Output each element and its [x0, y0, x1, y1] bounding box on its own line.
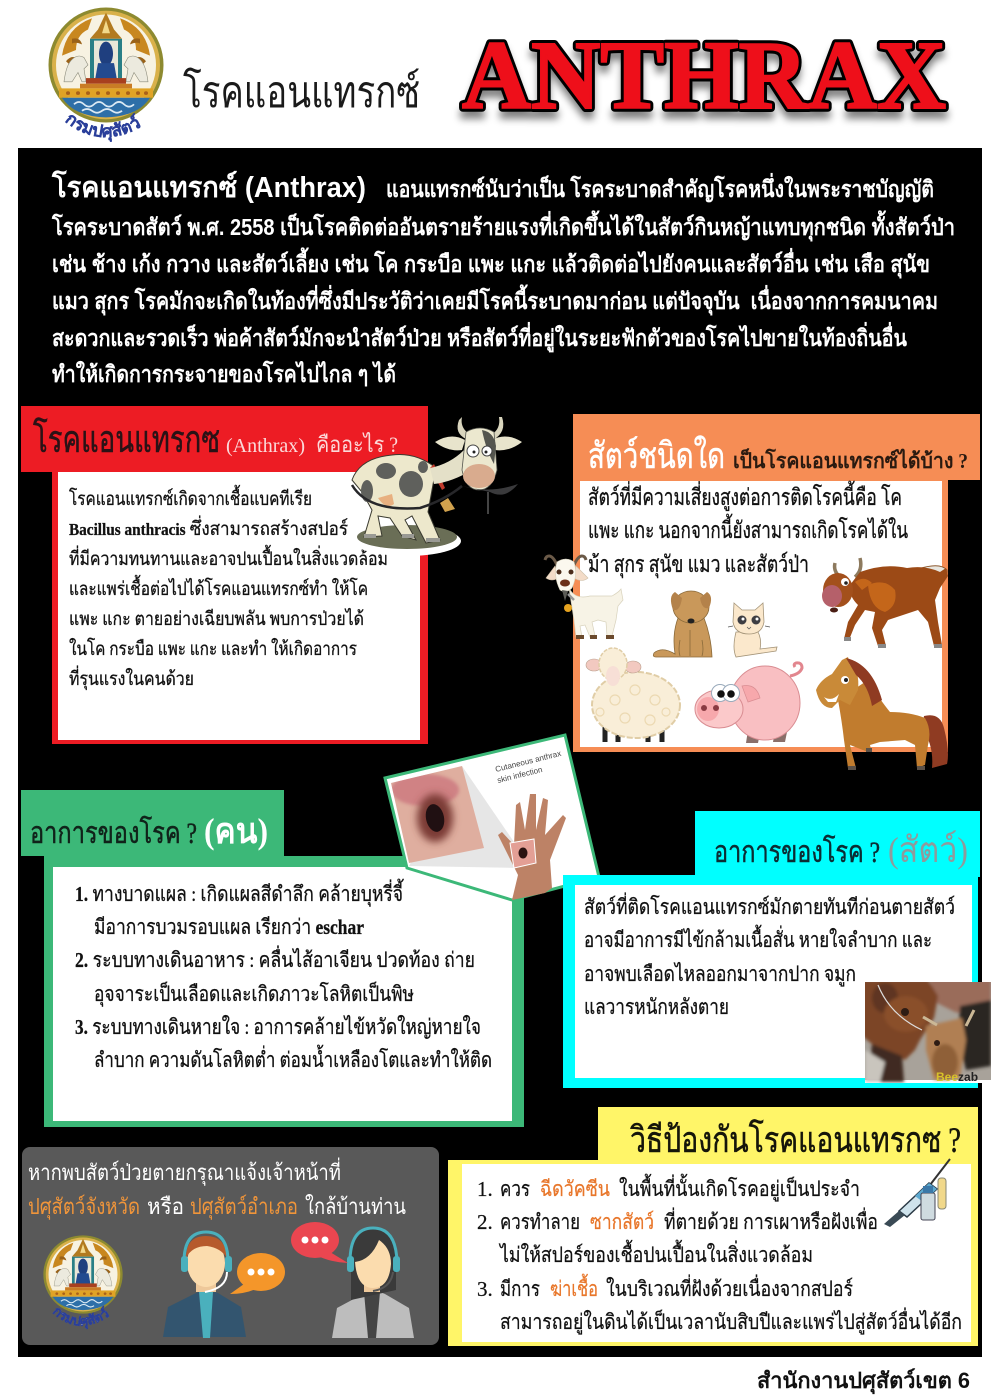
grey rounded background [22, 1147, 439, 1345]
numbered symptom list [75, 879, 492, 1072]
heading: what is anthrax [33, 417, 398, 461]
body text [69, 485, 388, 691]
icon: department seal: กรมปศุสัตว์ [65, 112, 140, 142]
image: cutaneous anthrax skin infection: Cutaneous anthrax [494, 749, 562, 774]
green header band [21, 790, 284, 856]
heading: which animals [588, 435, 968, 476]
body text: ที่มีความทนทานและอาจปนเปื้อนในสิ่งแวดล้อม [69, 545, 388, 570]
body text: ม้า สุกร สุนัข แมว และสัตว์ป่า [588, 551, 809, 578]
prevention list: ซากสัตว์ [590, 1210, 654, 1234]
icon: red speech bubble [291, 1222, 348, 1263]
icon: bull [822, 558, 948, 646]
notice text: ใกล้บ้านท่าน [305, 1194, 406, 1219]
heading: what is anthrax: คืออะไร ? [316, 432, 398, 457]
prevention list: 3. [477, 1277, 493, 1301]
icon: sick cow [352, 417, 522, 556]
notice text: หรือ [147, 1194, 184, 1219]
icon: orange speech bubble [230, 1253, 285, 1294]
notice text: หากพบสัตว์ป่วยตายกรุณาแจ้งเจ้าหน้าที่ [28, 1157, 341, 1186]
body text: แลวารหนักหลังตาย [584, 995, 729, 1019]
prevention list [477, 1174, 962, 1335]
heading: which animals: เป็นโรคแอนแทรกซ์ได้บ้าง ? [733, 447, 968, 473]
text block: introduction: ทำให้เกิดการกระจายของโรคไปไกล ๆ ได้ [52, 360, 396, 387]
icon: department seal [48, 8, 164, 142]
red header band [21, 406, 428, 472]
heading: what is anthrax: (Anthrax) [226, 435, 305, 457]
body text [588, 481, 908, 578]
white body area [58, 472, 420, 740]
icon: horse [816, 657, 948, 768]
image: sick cattle photo: Beezab [936, 1070, 978, 1084]
white body area [580, 481, 942, 747]
numbered symptom list: 2. ระบบทางเดินอาหาร : คลื่นไส้อาเจียน ปวดท้อง ถ่าย [75, 945, 475, 972]
icon: small department seal [43, 1235, 123, 1330]
body text: Bacillus anthracis ซึ่งสามารถสร้างสปอร์ [69, 515, 348, 540]
notice text [28, 1157, 406, 1220]
heading: what is anthrax: โรคแอนแทรกซ [33, 417, 220, 461]
cyan header band [695, 811, 980, 877]
panel: what is anthrax [21, 406, 428, 744]
notice text: ปศุสัตว์จังหวัด [28, 1194, 140, 1220]
heading: human symptoms: อาการของโรค ? [30, 815, 197, 850]
title: ANTHRAX: ANTHRAX [462, 22, 946, 130]
icon: pig [695, 663, 802, 743]
prevention list: ในบริเวณที่ฝังด้วยเนื่องจากสปอร์ [606, 1274, 853, 1301]
body text: โรคแอนแทรกซ์เกิดจากเชื้อแบคทีเรีย [69, 485, 312, 510]
prevention list: ไม่ให้สปอร์ของเชื้อปนเปื้อนในสิ่งแวดล้อม [498, 1240, 813, 1267]
text block: introduction: โรคแอนแทรกซ์ (Anthrax) [51, 169, 366, 204]
prevention list: ควร [500, 1177, 530, 1201]
body text: และแพร่เชื้อต่อไปได้โรคแอนแทรกซ์ทำ ให้โค [69, 575, 368, 600]
numbered symptom list: อุจจาระเป็นเลือดและเกิดภาวะโลหิตเป็นพิษ [94, 980, 414, 1007]
prevention list: 2. [477, 1210, 493, 1234]
icon: goat [545, 556, 623, 637]
numbered symptom list: 1. ทางบาดแผล : เกิดแผลสีดำลึก คล้ายบุหรี่จี้ [75, 879, 404, 907]
white body area [462, 1164, 971, 1342]
heading: animal symptoms: อาการของโรค ? [714, 834, 880, 869]
notice text: ปศุสัตว์อำเภอ [190, 1194, 298, 1220]
icon: syringe and vials [884, 1159, 950, 1227]
body text: แพะ แกะ ตายอย่างเฉียบพลัน พบการป่วยได้ [69, 608, 364, 630]
numbered symptom list: 3. ระบบทางเดินหายใจ : อาการคล้ายไข้หวัดใหญ่หายใจ [75, 1015, 481, 1039]
heading: animal symptoms [714, 830, 968, 870]
red bordered body [52, 472, 428, 744]
icon: male call operator [163, 1232, 246, 1338]
prevention list: 1. [477, 1177, 493, 1201]
heading: which animals: สัตว์ชนิดใด [588, 435, 725, 476]
image: cutaneous anthrax skin infection [385, 735, 599, 900]
body text: สัตว์ที่มีความเสี่ยงสูงต่อการติดโรคนี้คือ โค [588, 481, 902, 511]
body text: อาจพบเลือดไหลออกมาจากปาก จมูก [584, 962, 856, 987]
prevention list: ฆ่าเชื้อ [550, 1274, 598, 1301]
yellow bordered body [448, 1160, 978, 1346]
numbered symptom list: ลำบาก ความดันโลหิตต่ำ ต่อมน้ำเหลืองโตและทำให้ติด [94, 1045, 492, 1072]
icon: small department seal: กรมปศุสัตว์ [52, 1306, 109, 1330]
cyan bordered body [563, 875, 978, 1088]
title: ANTHRAX: ANTHRAX [462, 30, 946, 138]
icon: female call operator [332, 1228, 414, 1338]
prevention list: มีการ [500, 1277, 540, 1301]
green bordered body [44, 856, 524, 1127]
image: cutaneous anthrax skin infection: skin infection [496, 765, 543, 785]
body text: ที่รุนแรงในคนด้วย [69, 665, 194, 691]
prevention list: ควรทำลาย [500, 1210, 580, 1234]
panel: report notice [22, 1147, 439, 1345]
icon: cat [728, 603, 777, 657]
yellow header band [598, 1107, 978, 1163]
image: sick cattle photo [860, 980, 991, 1084]
title: Thai disease name: โรคแอนแทรกซ์ [183, 67, 420, 117]
white body area [575, 885, 972, 1078]
text block: introduction [51, 169, 955, 387]
orange header band [573, 414, 980, 480]
body text [584, 892, 955, 1019]
numbered symptom list: มีอาการบวมรอบแผล เรียกว่า eschar [94, 915, 364, 939]
prevention list: ในพื้นที่นั้นเกิดโรคอยู่เป็นประจำ [619, 1174, 860, 1202]
panel: human symptoms [21, 790, 524, 1127]
panel: prevention [448, 1107, 978, 1346]
panel: which animals [545, 414, 980, 768]
panel: animal symptoms [563, 811, 980, 1088]
heading: human symptoms: (คน) [204, 811, 268, 851]
footer: issuing office: สำนักงานปศุสัตว์เขต 6 [757, 1368, 970, 1395]
icon: dog [653, 591, 712, 657]
prevention list: ที่ตายด้วย การเผาหรือฝังเพื่อ [664, 1207, 878, 1234]
heading: animal symptoms: (สัตว์) [888, 830, 968, 870]
title: ANTHRAX: ANTHRAX [462, 22, 946, 130]
prevention list: ฉีดวัคซีน [540, 1177, 610, 1201]
white body area [53, 867, 512, 1121]
icon: sheep [586, 648, 680, 742]
orange bordered body [573, 480, 948, 752]
body text: ในโค กระบือ แพะ แกะ และทำ ให้เกิดอาการ [69, 637, 357, 660]
